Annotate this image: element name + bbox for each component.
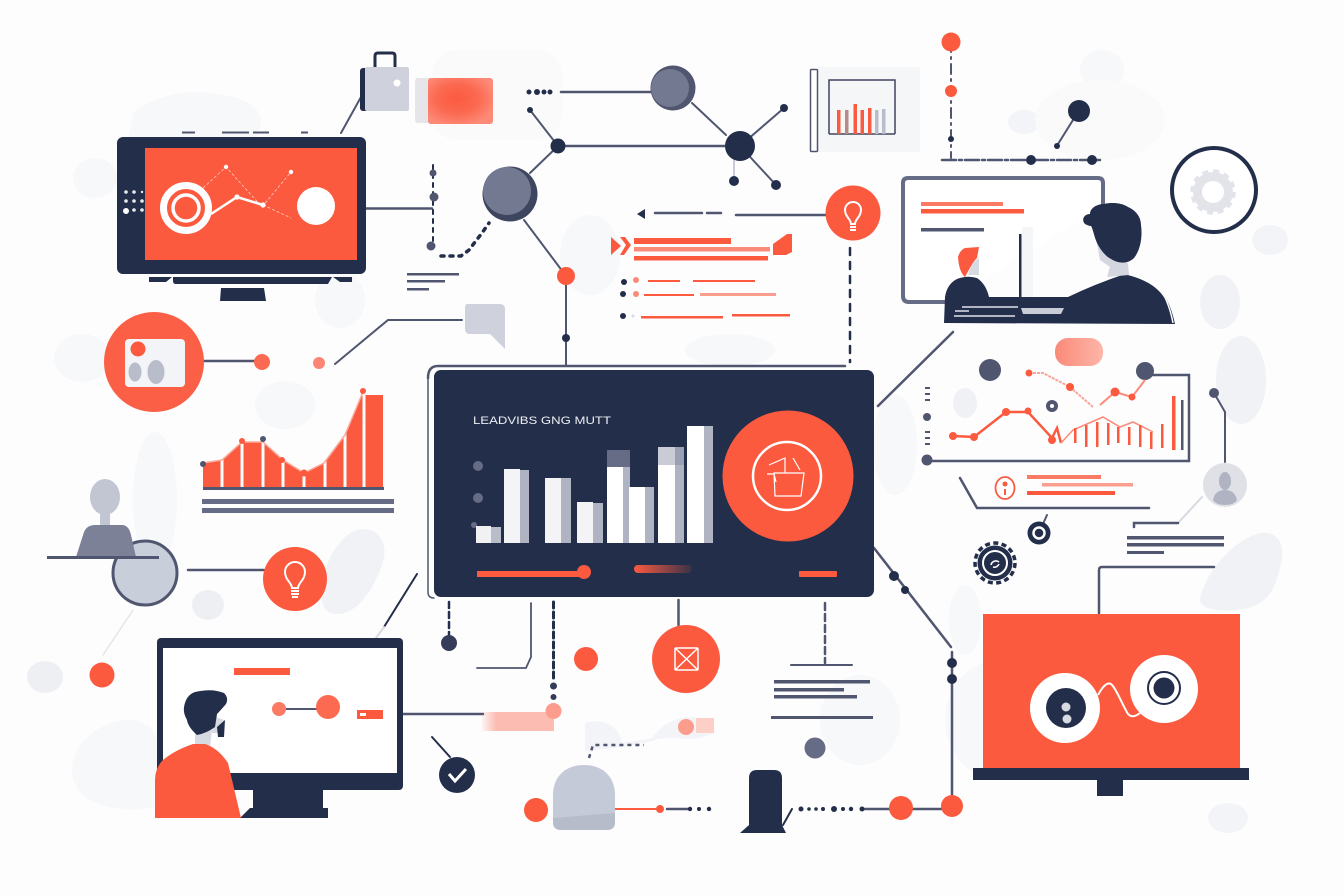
text lines right	[1127, 536, 1224, 554]
mini chart card	[810, 67, 920, 152]
indicator dots	[123, 190, 144, 214]
orange circle icon	[722, 410, 854, 542]
text lines under x badge	[771, 680, 873, 719]
target chart icon	[164, 165, 293, 230]
arrow and dashes	[637, 209, 645, 219]
main dashboard panel	[434, 370, 874, 597]
top-right screen with people	[903, 178, 1175, 324]
lightbulb badge: lower left	[263, 547, 327, 611]
orange laptop with eyes	[973, 614, 1249, 796]
network nodes	[90, 32, 1219, 822]
panel heading: LEADVIBS GNG MUTT	[473, 415, 611, 427]
speech bubble	[465, 304, 505, 349]
list with bulb badge	[611, 186, 880, 319]
pill	[1055, 338, 1103, 366]
red progress tag	[482, 703, 562, 731]
axis ticks	[923, 387, 931, 445]
slider	[477, 565, 837, 579]
small lines above monitor	[182, 132, 308, 134]
circle badge: people photo	[104, 312, 204, 412]
top-left monitor	[117, 137, 366, 301]
screen lines	[921, 202, 1033, 298]
large person head	[1083, 203, 1142, 277]
pale upper line	[1026, 370, 1145, 407]
connector network	[103, 42, 1225, 825]
axis dots	[471, 461, 483, 528]
ring node	[1028, 522, 1050, 544]
gear ring icon	[1172, 148, 1256, 232]
text lines left of bubble	[407, 273, 459, 290]
area bar chart	[200, 388, 394, 513]
line chart panel	[922, 338, 1189, 466]
bulb badge: top	[826, 186, 880, 240]
dome device	[553, 765, 615, 830]
lower-left monitor with person	[155, 638, 403, 818]
red bars	[1074, 396, 1184, 450]
dark tower device	[740, 770, 786, 833]
red X badge	[652, 625, 720, 693]
red card	[415, 78, 493, 124]
small person	[944, 247, 1175, 324]
chevrons	[611, 237, 631, 255]
avatar circle	[1203, 463, 1247, 507]
icon: padlock	[360, 53, 409, 111]
main red line	[949, 408, 1153, 444]
person at table with mirror	[47, 479, 177, 605]
bar chart	[476, 426, 713, 543]
check badge	[439, 757, 475, 793]
monitor stand	[149, 277, 352, 301]
gear icon	[975, 543, 1015, 583]
info row	[996, 475, 1133, 499]
person	[155, 690, 241, 818]
folded tag	[773, 234, 792, 255]
dashed trail above dome	[585, 717, 714, 758]
